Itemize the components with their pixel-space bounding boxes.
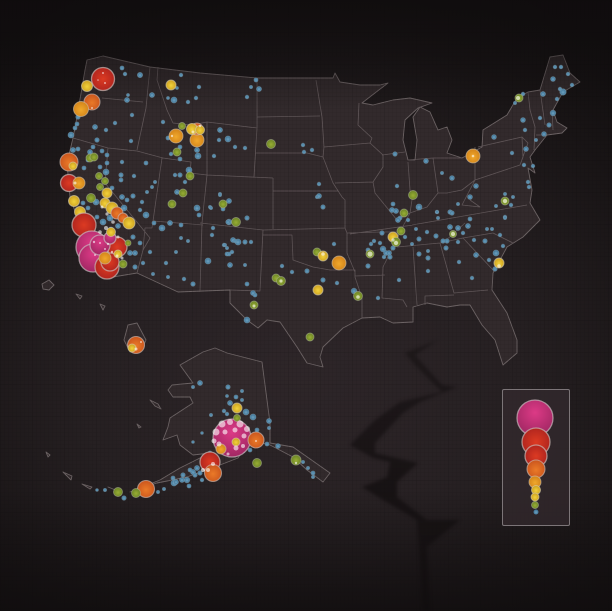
- state borders: [73, 67, 553, 318]
- white highlight sparkles on dense clusters: [74, 72, 520, 472]
- map: Hawaii: [42, 280, 146, 352]
- Alaska mainland outline: [130, 348, 330, 492]
- Hawaii bubbles: [128, 336, 144, 354]
- map: contiguous United States: [67, 55, 580, 367]
- legend bubbles: size scale: [517, 400, 553, 514]
- legend frame: [502, 390, 570, 526]
- Alaska bubbles: [114, 403, 301, 498]
- Idaho and Montana cluster: [168, 122, 204, 208]
- outline: lower 48: [67, 55, 580, 367]
- legend panel: [502, 390, 570, 526]
- Hawaiian islands: [42, 280, 146, 352]
- map: Alaska: [46, 348, 330, 492]
- blue small earthquake markers: [68, 65, 574, 500]
- Aleutian and Bering islands: [46, 400, 161, 491]
- west coast large earthquake bubbles: [60, 68, 176, 279]
- ground crack: [350, 340, 460, 611]
- interior and east bubbles: [219, 94, 523, 341]
